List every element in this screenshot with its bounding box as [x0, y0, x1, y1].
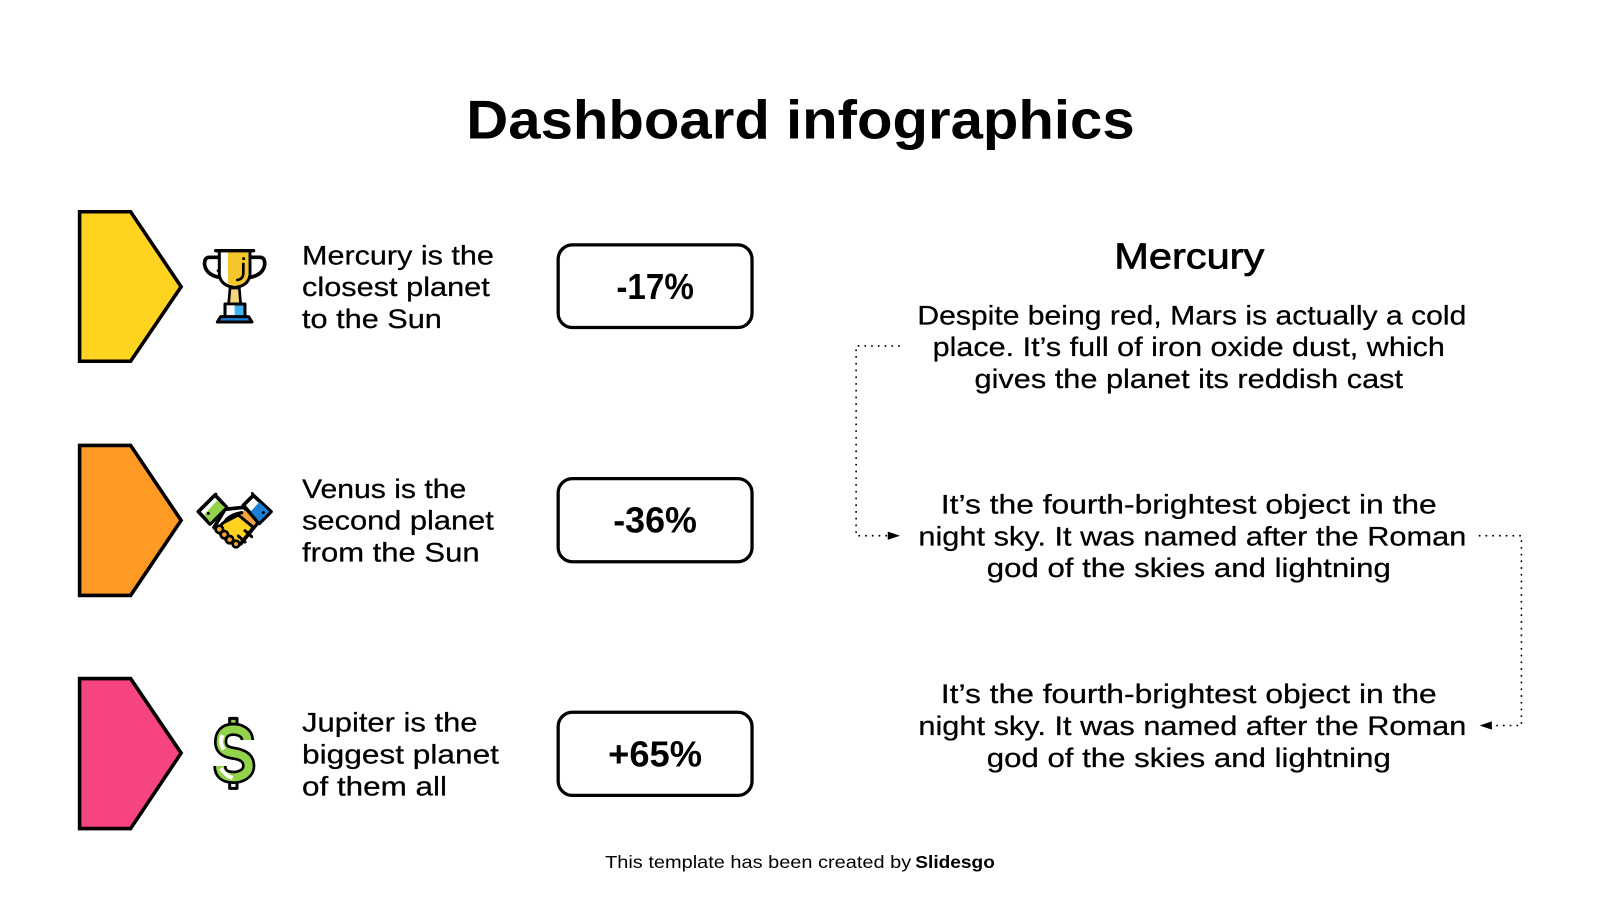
text: Jupiter description: biggest planet: [302, 739, 500, 769]
arrow: dotted connector right: [1480, 536, 1521, 730]
text block: Mars description: Despite being red, Mars is actually a cold: [917, 300, 1466, 330]
text: Venus description: from the Sun: [302, 538, 480, 568]
text block: fourth-brightest object, first: god of the skies and lightning: [987, 553, 1391, 583]
value box: -36%: -36%: [613, 501, 697, 541]
orange pentagon marker: [80, 445, 181, 595]
text: Jupiter description: Jupiter is the: [302, 708, 478, 738]
text: Mercury description: Mercury is the: [302, 240, 494, 270]
value box: +65%: +65%: [608, 734, 702, 774]
text: Jupiter description: of them all: [302, 771, 447, 801]
text: Venus description: Venus is the: [302, 474, 466, 504]
text block: Mars description: [917, 300, 1466, 394]
row: Venus: [80, 445, 752, 595]
value box: -17%: [558, 245, 752, 328]
text block: fourth-brightest object, second: [918, 679, 1466, 773]
text block: fourth-brightest object, second: god of the skies and lightning: [987, 743, 1391, 773]
footer credit: This template has been created by: [605, 852, 911, 872]
heading: Mercury: Mercury: [1114, 236, 1264, 276]
text block: Mars description: place. It’s full of iron oxide dust, which: [933, 332, 1445, 362]
text: Mercury description: closest planet: [302, 272, 490, 302]
text block: fourth-brightest object, second: night sky. It was named after the Roman: [918, 711, 1466, 741]
text block: fourth-brightest object, second: It’s the fourth-brightest object in the: [941, 679, 1437, 709]
text: Venus description: [302, 474, 494, 568]
row: Jupiter: [80, 679, 752, 829]
text: Jupiter description: [302, 708, 500, 801]
text: Mercury description: to the Sun: [302, 304, 442, 334]
value box: +65%: [558, 712, 752, 795]
text block: fourth-brightest object, first: [918, 489, 1466, 583]
pink pentagon marker: [80, 679, 181, 829]
text block: Mars description: gives the planet its reddish cast: [974, 364, 1404, 394]
value box: -17%: -17%: [616, 267, 694, 307]
icon: dollar sign: [220, 718, 249, 788]
arrow: dotted connector left: [856, 346, 900, 540]
text: Venus description: second planet: [302, 506, 494, 536]
icon: trophy: [205, 251, 265, 322]
row: Mercury: [80, 212, 752, 361]
text: Mercury description: [302, 240, 494, 334]
text block: fourth-brightest object, first: It’s the fourth-brightest object in the: [941, 489, 1437, 519]
icon: handshake: [198, 492, 271, 547]
yellow pentagon marker: [80, 212, 181, 361]
value box: -36%: [558, 479, 752, 562]
title: Dashboard infographics: [466, 88, 1135, 150]
text block: fourth-brightest object, first: night sky. It was named after the Roman: [918, 521, 1466, 551]
footer credit: Slidesgo: [915, 852, 995, 872]
